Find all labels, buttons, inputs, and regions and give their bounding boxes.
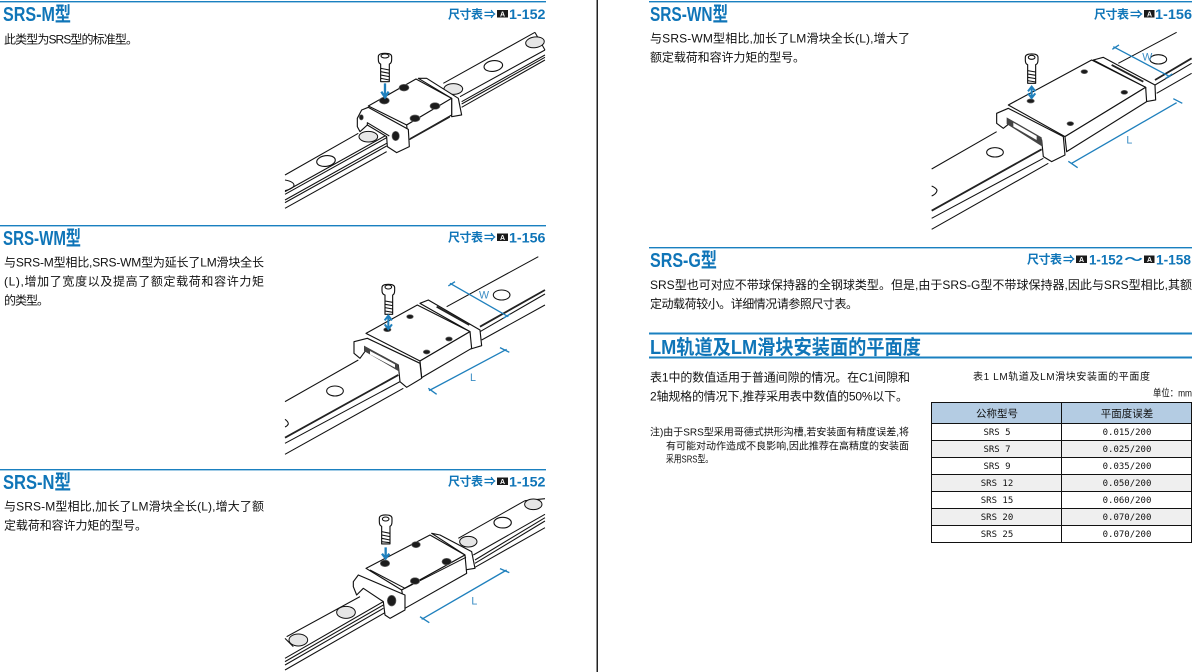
description text: 的类型。 (4, 292, 49, 308)
table: flatness: SRS 5 (983, 428, 1011, 438)
size table reference: 1-152: A (500, 12, 505, 18)
table: flatness: SRS 25 (981, 530, 1013, 540)
description text: 定动载荷较小。详细情况请参照尺寸表。 (650, 296, 858, 311)
table caption: 表1 LM轨道及LM滑块安装面的平面度 (973, 370, 1150, 383)
panel: SRS-G (649, 247, 1192, 311)
size table reference: 1-152: 1-152 (509, 6, 546, 22)
size table reference: 1-156: ⇒ (1130, 8, 1143, 22)
dimension: W (448, 282, 510, 318)
dimension: L (428, 348, 509, 394)
note (650, 426, 909, 466)
table: flatness: SRS 12 (981, 479, 1013, 489)
size table reference: 1-156: 尺寸表 (448, 230, 483, 244)
size table reference: 1-152 to 1-158: 1-152 (1089, 252, 1123, 268)
size table reference: 1-152 to 1-158: 1-158 (1156, 252, 1191, 268)
dimension: W: W (1142, 52, 1153, 64)
description text: 与SRS-M型相比,加长了LM滑块全长(L),增大了额 (4, 498, 264, 514)
description text (650, 30, 910, 64)
table: flatness: 0.070/200 (1103, 513, 1151, 523)
note: 采用SRS型。 (666, 452, 713, 466)
description text: 与SRS-WM型相比,加长了LM滑块全长(L),增大了 (650, 30, 910, 46)
dimension: W: W (479, 290, 490, 302)
size table reference: 1-152: 尺寸表 (448, 474, 483, 488)
explanatory text: 2轴规格的情况下,推荐采用表中数值的50%以下。 (650, 388, 908, 404)
size table reference: 1-156: 1-156 (509, 230, 546, 246)
illustration: SRS-WN guide (932, 32, 1192, 229)
description text: 此类型为SRS型的标准型。 (4, 32, 138, 46)
heading: SRS-G: SRS-G型 (650, 249, 717, 272)
table: flatness: 0.050/200 (1103, 479, 1151, 489)
dimension: L (1068, 99, 1182, 168)
illustration: SRS-M guide (285, 32, 545, 208)
dimension: W (1112, 45, 1172, 78)
heading: SRS-WM: SRS-WM型 (3, 227, 81, 250)
dimension: L: L (1126, 134, 1132, 146)
table: flatness: 0.015/200 (1103, 428, 1151, 438)
size table reference: 1-152 to 1-158: A (1147, 257, 1152, 264)
heading: SRS-WN: SRS-WN型 (650, 3, 728, 26)
description text (650, 277, 1192, 311)
description text: 与SRS-M型相比,SRS-WM型为延长了LM滑块全长 (4, 254, 264, 270)
table: flatness (932, 402, 1192, 543)
size table reference: 1-156: A (1147, 12, 1152, 18)
size table reference: 1-152: 1-152 (509, 474, 546, 490)
size table reference: 1-156: 1-156 (1155, 6, 1192, 22)
dimension: L: L (470, 372, 476, 384)
note: 有可能对动作造成不良影响,因此推荐在高精度的安装面 (666, 440, 909, 452)
size table reference: 1-152: ⇒ (484, 8, 496, 22)
size table reference: 1-156: 尺寸表 (1094, 6, 1129, 22)
table: flatness: 0.070/200 (1103, 530, 1151, 540)
illustration: SRS-N guide (285, 499, 545, 670)
description text: (L),增加了宽度以及提高了额定载荷和容许力矩 (4, 274, 264, 288)
description text (4, 498, 264, 532)
size table reference: 1-152: 尺寸表 (448, 6, 483, 22)
table: flatness: SRS 20 (981, 513, 1013, 523)
size table reference: 1-152: ⇒ (484, 474, 496, 488)
table: flatness: SRS 15 (981, 496, 1013, 506)
size table reference: 1-152 (448, 474, 546, 490)
table: flatness: 0.035/200 (1103, 462, 1151, 472)
table: flatness: 0.025/200 (1103, 445, 1151, 455)
explanatory text: 表1中的数值适用于普通间隙的情况。在C1间隙和 (650, 370, 910, 384)
size table reference: 1-152 to 1-158 (1027, 252, 1191, 268)
heading: flatness: LM轨道及LM滑块安装面的平面度 (650, 336, 921, 359)
size table reference: 1-152: A (500, 479, 505, 486)
description text (4, 254, 264, 308)
panel: SRS-N (0, 469, 546, 670)
panel: SRS-WM (0, 225, 546, 454)
panel: SRS-WN (649, 1, 1192, 229)
table: flatness: 0.060/200 (1103, 496, 1151, 506)
dimension: L: L (471, 595, 477, 607)
size table reference: 1-156: ⇒ (484, 230, 496, 244)
note: 注)由于SRS型采用哥德式拱形沟槽,若安装面有精度误差,将 (650, 426, 909, 438)
size table reference: 1-152 to 1-158: A (1079, 257, 1084, 264)
size table reference: 1-152 (448, 6, 546, 22)
size table reference: 1-156: A (500, 235, 505, 242)
table: flatness: SRS 9 (983, 462, 1011, 472)
dimension: L (420, 569, 509, 623)
size table reference: 1-156 (1094, 6, 1192, 22)
panel: SRS-M (0, 1, 546, 208)
table: flatness: 平面度误差 (1101, 407, 1153, 420)
explanatory text (650, 370, 910, 404)
description text: SRS型也可对应不带球保持器的全钢球类型。但是,由于SRS-G型不带球保持器,因此与SRS型相比,其额 (650, 277, 1192, 292)
heading: SRS-N: SRS-N型 (3, 471, 71, 494)
size table reference: 1-152 to 1-158: ～ (1124, 252, 1143, 266)
description text: 额定载荷和容许力矩的型号。 (650, 50, 805, 64)
size table reference: 1-152 to 1-158: 尺寸表 (1027, 252, 1062, 266)
panel: flatness of mounting surface (649, 332, 1192, 543)
size table reference: 1-152 to 1-158: ⇒ (1063, 252, 1075, 266)
size table reference: 1-156 (448, 230, 546, 246)
table: flatness: 公称型号 (976, 407, 1018, 420)
description text: 定载荷和容许力矩的型号。 (4, 518, 147, 532)
table: flatness: SRS 7 (983, 445, 1011, 455)
illustration: SRS-WM guide (285, 257, 545, 454)
heading: SRS-M: SRS-M型 (3, 3, 71, 26)
